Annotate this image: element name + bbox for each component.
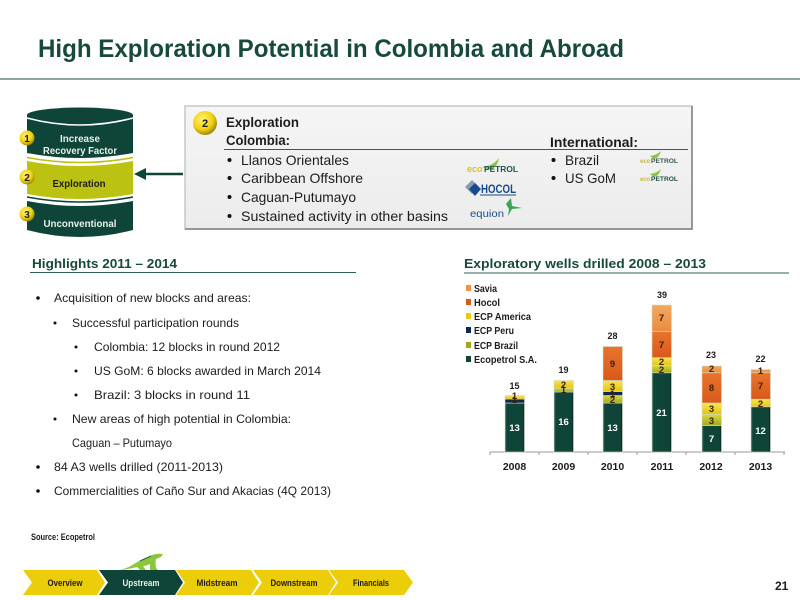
panel: exploration xyxy=(185,106,692,229)
segment values: 8 xyxy=(709,383,714,394)
nav: downstream xyxy=(253,570,336,595)
totals: 39 xyxy=(657,290,667,300)
badge: 2: 2 xyxy=(202,118,208,130)
list: colombia basins: Caguan-Putumayo xyxy=(241,189,356,205)
totals: 19 xyxy=(558,365,569,375)
segment values: 2 xyxy=(561,380,566,391)
segment values: 3 xyxy=(709,416,714,427)
segment values: 13 xyxy=(509,423,520,434)
badge 3: 3 xyxy=(24,210,30,221)
logo: ecopetrol brazil xyxy=(640,151,678,165)
segment values: 2 xyxy=(659,357,664,368)
heading: exploratory wells: Exploratory wells drilled 2008 – 2013 xyxy=(464,256,706,271)
logo: ecopetrol: eco xyxy=(467,164,483,174)
bar: 2010 xyxy=(603,346,622,452)
text block: highlights list: Successful participation rounds xyxy=(72,316,239,330)
segment values: 1 xyxy=(561,385,567,396)
legend: ECP Brazil xyxy=(474,341,518,352)
totals: 28 xyxy=(607,331,618,341)
badge 3 xyxy=(20,206,34,222)
segment values: 21 xyxy=(656,408,667,419)
logo: ecopetrol xyxy=(467,158,518,174)
year labels: 2009 xyxy=(552,461,575,473)
year labels xyxy=(503,461,772,473)
logo: ecopetrol brazil: PETROL xyxy=(651,159,678,165)
cylinder: bottom section xyxy=(27,201,133,237)
totals: 23 xyxy=(706,350,716,360)
segment values: 7 xyxy=(758,381,763,392)
year labels: 2010 xyxy=(601,461,624,473)
legend: ECP Peru xyxy=(474,326,514,337)
bar: 2013 xyxy=(751,370,770,452)
segment values: 9 xyxy=(610,359,615,370)
logo: ecopetrol america xyxy=(640,169,678,183)
segment values: 7 xyxy=(709,434,714,445)
cylinder: top section xyxy=(27,115,133,158)
segment values: 1 xyxy=(512,391,518,402)
segment values: 2 xyxy=(758,399,763,410)
heading: colombia: Colombia: xyxy=(226,132,290,148)
badge: 2 xyxy=(193,111,217,135)
segment values: 3 xyxy=(610,382,615,393)
legend: Savia xyxy=(474,284,497,295)
text block: highlights list: Acquisition of new blocks and areas: xyxy=(54,291,251,305)
legend: ECP America xyxy=(474,312,531,323)
totals xyxy=(509,290,766,391)
logo: ecopetrol brazil: eco xyxy=(640,159,651,165)
nav: midstream xyxy=(176,570,259,595)
list: colombia basins: Sustained activity in other basins xyxy=(241,208,448,224)
year labels: 2008 xyxy=(503,461,526,473)
legend: Ecopetrol S.A. xyxy=(474,355,537,366)
bar: 2012 xyxy=(702,366,722,452)
segment values: 12 xyxy=(755,426,766,437)
arrow: panel to exploration xyxy=(134,168,183,180)
segment values xyxy=(509,313,766,445)
logo: hocol xyxy=(465,180,516,196)
text block: highlights list: Commercialities of Caño Sur and Akacias (4Q 2013) xyxy=(54,484,331,498)
segment values: 13 xyxy=(607,423,618,434)
badge 1 xyxy=(20,130,34,146)
list: colombia basins: Caribbean Offshore xyxy=(241,170,363,186)
text block: highlights list: Colombia: 12 blocks in round 2012 xyxy=(94,340,280,354)
year labels: 2012 xyxy=(699,461,723,473)
list: international xyxy=(552,152,616,186)
bar: 2011 xyxy=(652,305,672,452)
logo: ecopetrol america: eco xyxy=(640,177,651,183)
text block: highlights list: New areas of high potential in Colombia: xyxy=(72,412,291,426)
logo: equion: equion xyxy=(470,209,504,220)
segment values: 3 xyxy=(709,404,714,415)
year labels: 2013 xyxy=(749,461,772,473)
nav: financials: Financials xyxy=(353,578,389,588)
nav: upstream: Upstream xyxy=(122,578,160,588)
label: increase: Increase xyxy=(60,133,100,145)
nav: financials xyxy=(329,570,413,595)
bar: 2008 xyxy=(505,396,524,452)
logo: ecopetrol: PETROL xyxy=(484,165,518,174)
text block: highlights list: 84 A3 wells drilled (2011-2013) xyxy=(54,460,223,474)
totals: 15 xyxy=(509,381,520,391)
page number: 21 xyxy=(775,579,789,593)
list: international: Brazil xyxy=(565,152,599,168)
badge 1: 1 xyxy=(24,134,30,145)
logo: equion xyxy=(470,198,522,220)
label: recovery factor: Recovery Factor xyxy=(43,145,117,157)
nav: overview xyxy=(23,570,105,595)
list: international: US GoM xyxy=(565,170,616,186)
cylinder: middle section xyxy=(27,161,133,199)
segment values: 7 xyxy=(659,340,664,351)
totals: 22 xyxy=(755,354,766,364)
label: exploration: Exploration xyxy=(52,178,106,190)
icon: strategy cylinder xyxy=(27,108,133,237)
source note: Source: Ecopetrol xyxy=(31,532,95,542)
text block: highlights list: US GoM: 6 blocks awarded in March 2014 xyxy=(94,364,321,378)
segment values: 2 xyxy=(709,364,714,375)
segment values: 7 xyxy=(659,313,664,324)
text block: highlights list: Brazil: 3 blocks in round 11 xyxy=(94,388,250,402)
icon: iguana xyxy=(120,554,163,570)
badge 2 xyxy=(20,170,34,184)
heading: highlights: Highlights 2011 – 2014 xyxy=(32,256,178,271)
badge 2: 2 xyxy=(24,173,30,184)
nav: overview: Overview xyxy=(48,578,83,588)
list: colombia basins xyxy=(228,152,448,224)
nav: upstream xyxy=(99,570,183,595)
label: unconventional: Unconventional xyxy=(44,218,117,230)
segment values: 16 xyxy=(558,417,569,428)
legend: Hocol xyxy=(474,298,500,309)
heading: exploration: Exploration xyxy=(226,114,299,130)
segment values: 1 xyxy=(512,395,518,406)
logo: ecopetrol america: PETROL xyxy=(651,177,678,183)
heading: international: International: xyxy=(550,134,638,150)
segment values: 1 xyxy=(610,389,616,400)
list: colombia basins: Llanos Orientales xyxy=(241,152,349,168)
segment values: 1 xyxy=(758,366,764,377)
logo: hocol: HOCOL xyxy=(481,182,516,196)
legend xyxy=(466,284,537,366)
segment values: 2 xyxy=(610,395,615,406)
bar chart: exploratory wells xyxy=(490,290,785,473)
text block: highlights list xyxy=(36,291,331,498)
year labels: 2011 xyxy=(651,461,674,473)
navigation: section chevrons xyxy=(23,570,413,595)
segment values: 2 xyxy=(659,365,664,376)
title: High Exploration Potential in Colombia and Abroad xyxy=(38,35,624,63)
nav: midstream: Midstream xyxy=(196,578,238,588)
nav: downstream: Downstream xyxy=(270,578,318,588)
bar: 2009 xyxy=(554,380,574,452)
text block: highlights list: Caguan – Putumayo xyxy=(72,436,172,450)
